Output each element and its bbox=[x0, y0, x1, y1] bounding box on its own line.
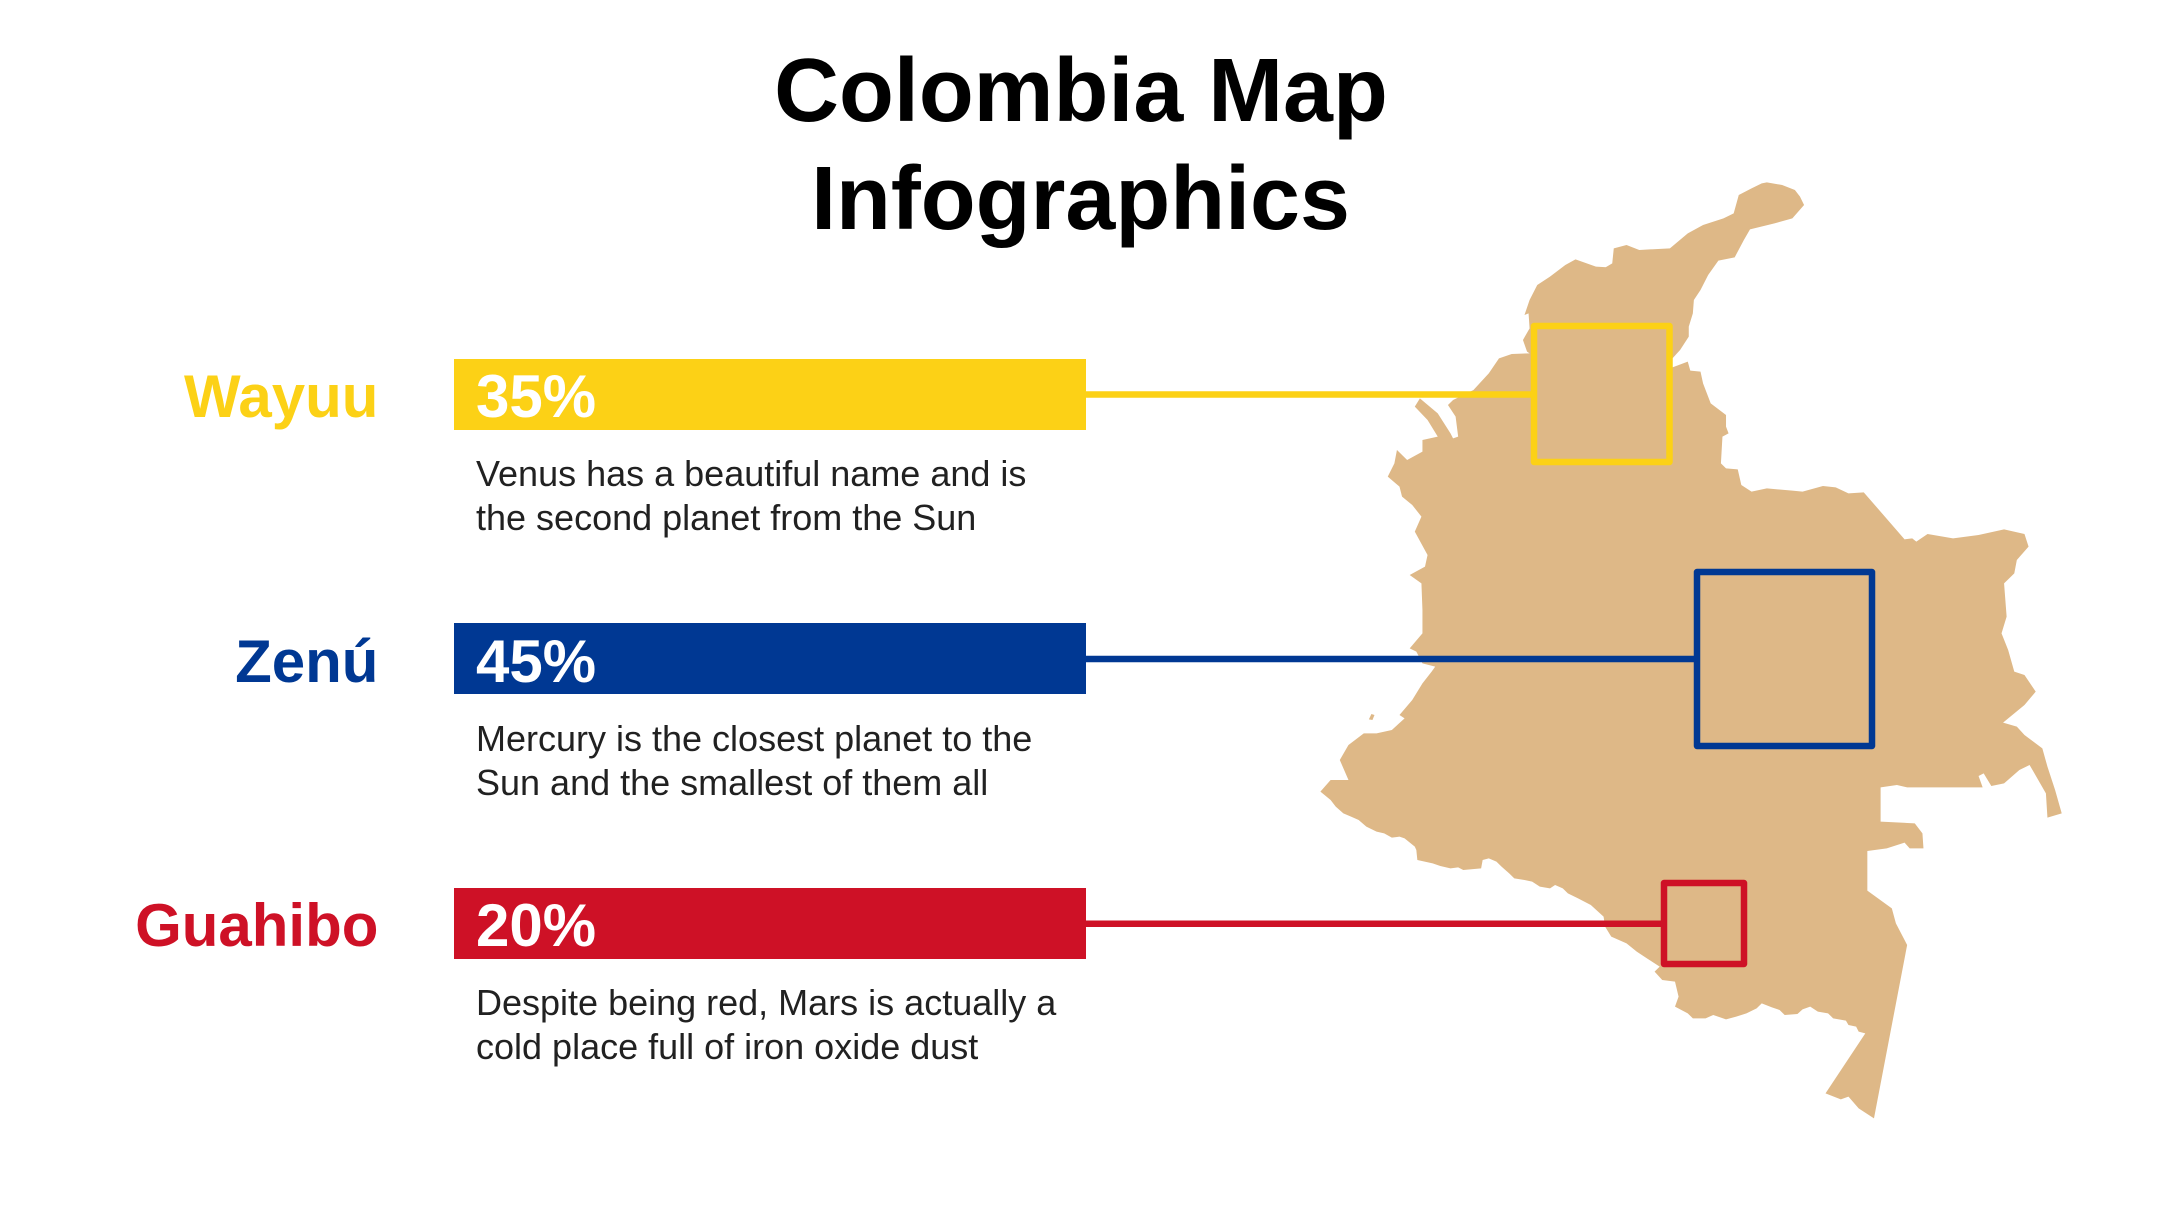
description: Zenú: Sun and the smallest of them all bbox=[476, 762, 988, 803]
title bbox=[774, 41, 1388, 249]
bar: 35% bbox=[454, 359, 1086, 430]
value: 20%: 20% bbox=[476, 892, 596, 959]
connector: Zenú bbox=[1086, 656, 1697, 662]
callout: Zenú bbox=[235, 572, 1872, 803]
callout: Guahibo bbox=[135, 883, 1744, 1067]
description: Wayuu: the second planet from the Sun bbox=[476, 497, 976, 538]
map box: Wayuu bbox=[1534, 326, 1670, 462]
connector: Guahibo bbox=[1086, 920, 1664, 927]
map box: Guahibo bbox=[1664, 883, 1744, 964]
value: 45%: 45% bbox=[476, 628, 596, 695]
connector: Wayuu bbox=[1086, 391, 1534, 398]
label: Guahibo: Guahibo bbox=[135, 892, 378, 959]
callout: Wayuu bbox=[184, 326, 1670, 538]
bar: 20% bbox=[454, 888, 1086, 959]
value: 35%: 35% bbox=[476, 363, 596, 430]
description: Guahibo: cold place full of iron oxide dust bbox=[476, 1026, 978, 1067]
description: Guahibo: Despite being red, Mars is actually a bbox=[476, 982, 1057, 1023]
label: Wayuu: Wayuu bbox=[184, 363, 378, 430]
map box: Zenú bbox=[1697, 572, 1872, 746]
map: Colombia bbox=[1320, 182, 2062, 1118]
description: Wayuu: Venus has a beautiful name and is bbox=[476, 453, 1026, 494]
title: Colombia Map bbox=[774, 41, 1388, 141]
bar: 45% bbox=[454, 623, 1086, 694]
label: Zenú: Zenú bbox=[235, 628, 378, 695]
description: Zenú: Mercury is the closest planet to the bbox=[476, 718, 1032, 759]
title: Infographics bbox=[811, 149, 1350, 249]
